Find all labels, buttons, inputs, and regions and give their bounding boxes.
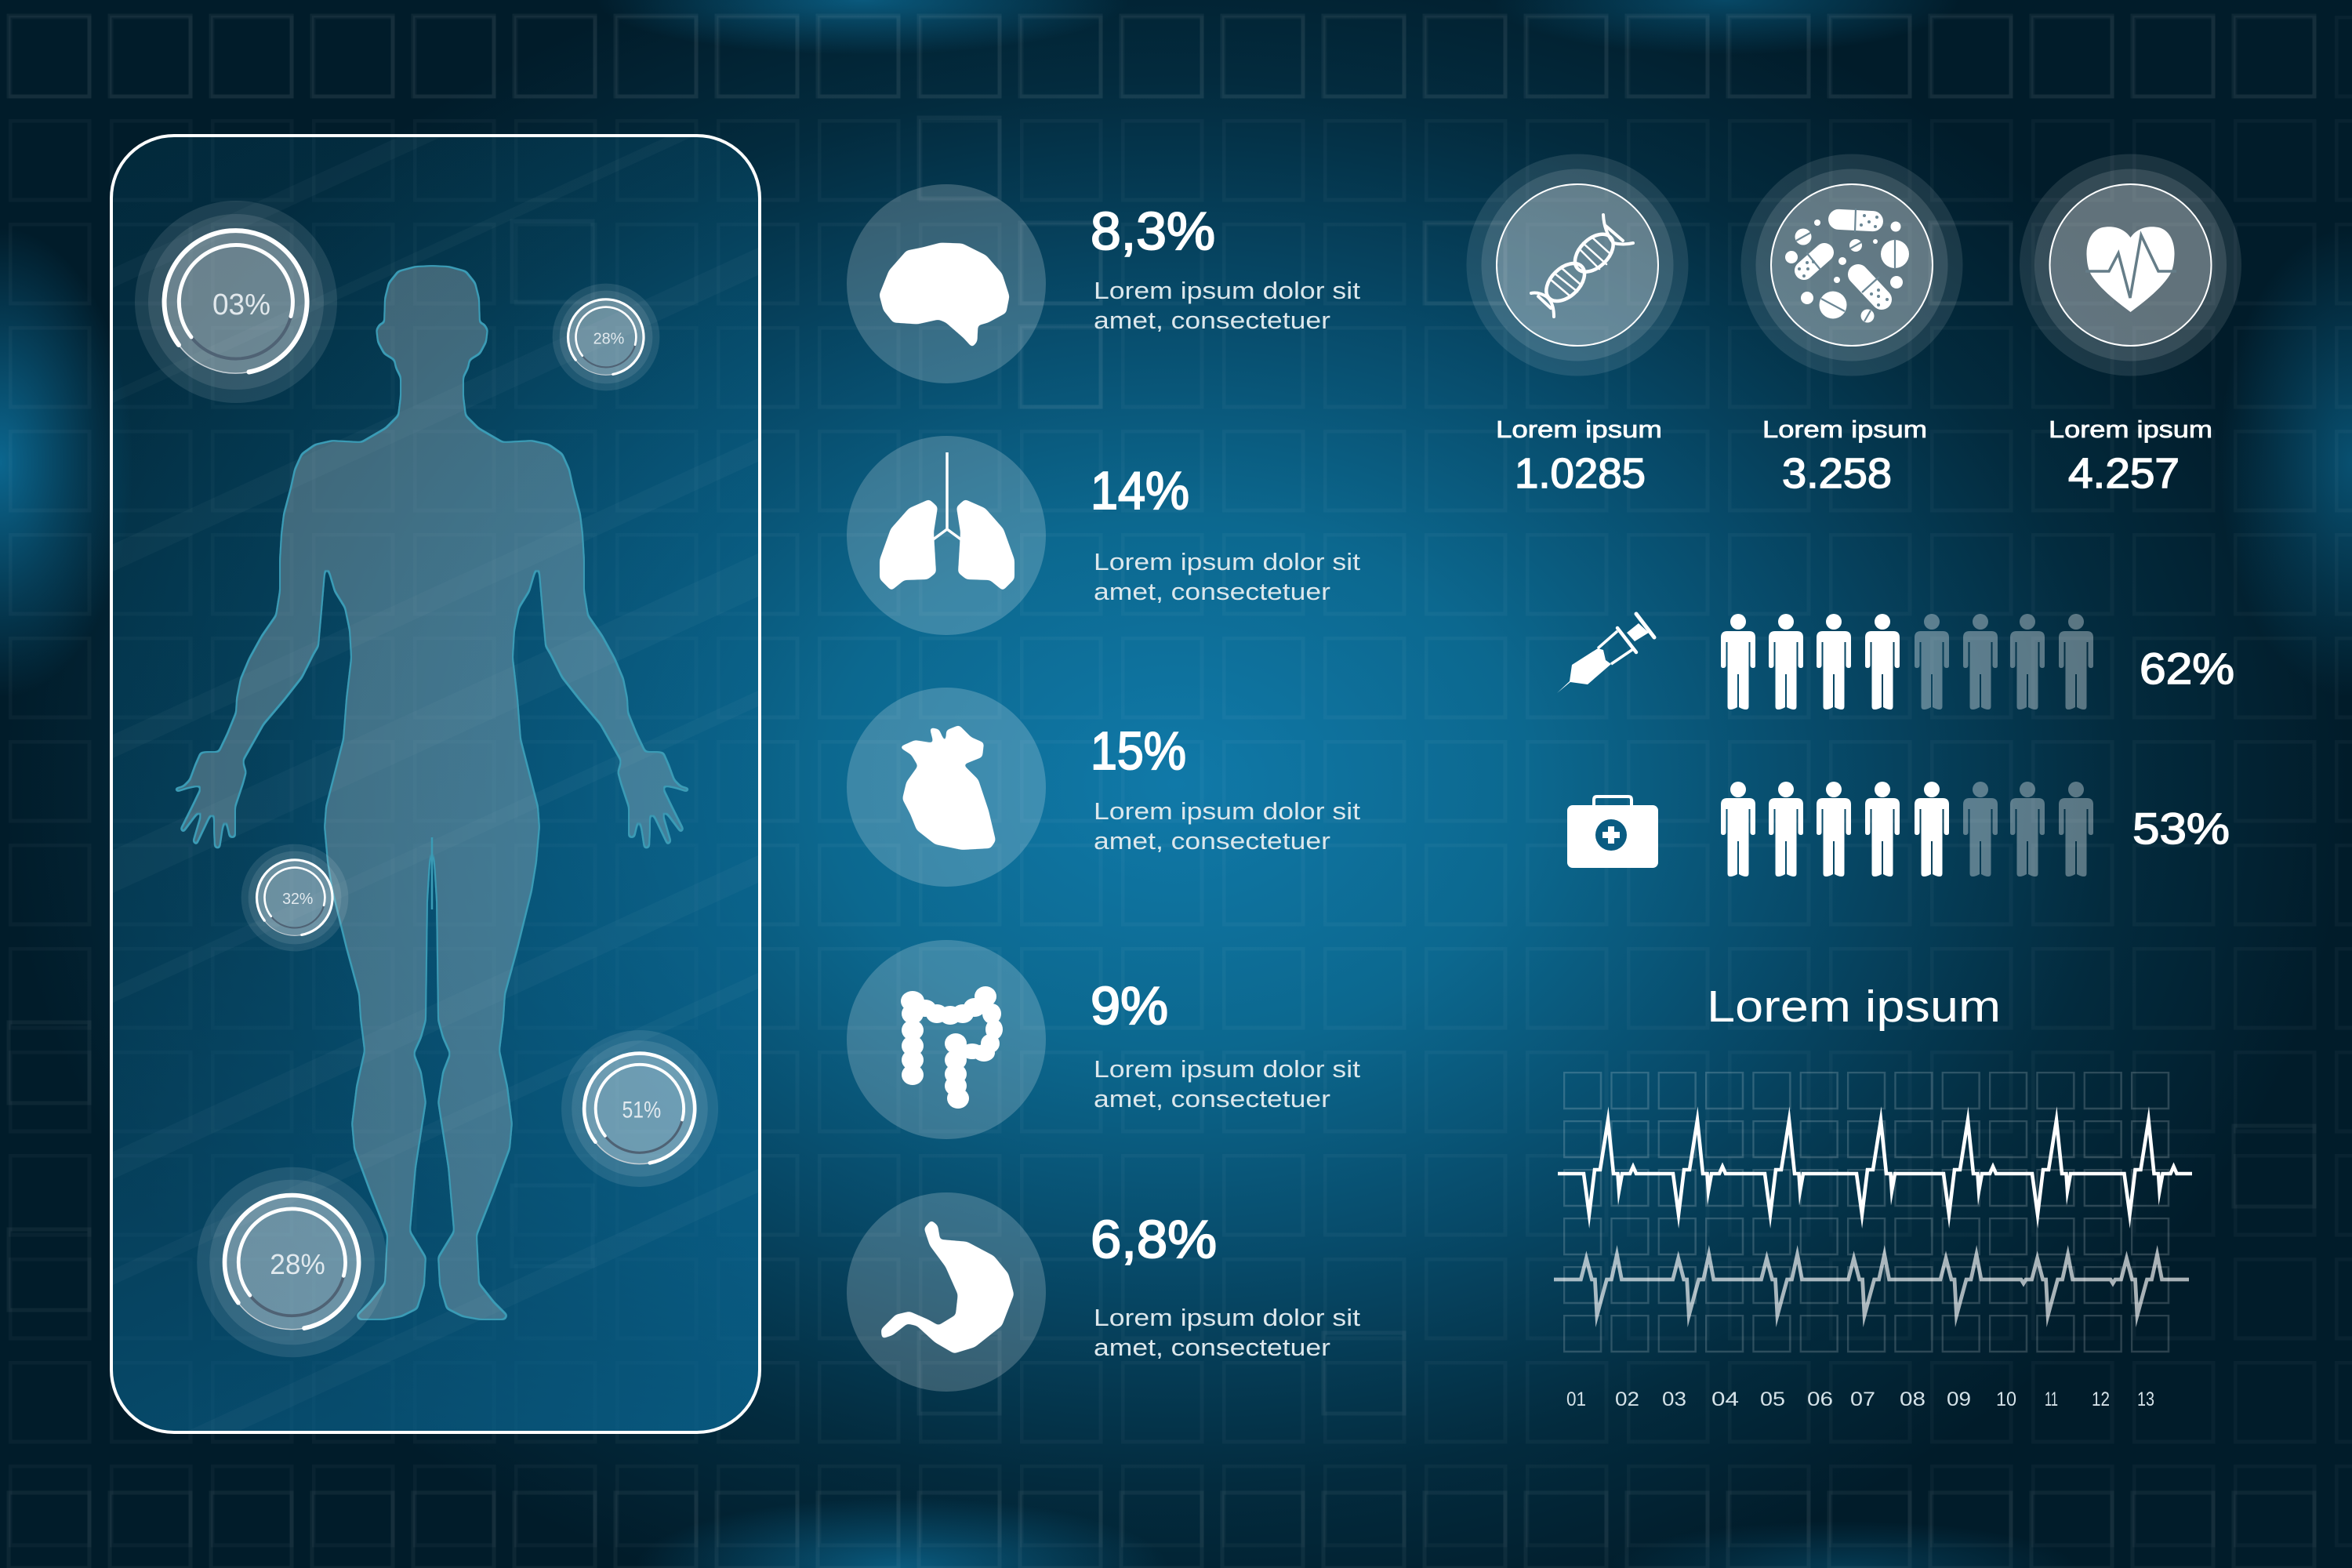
ecg axis labels: 06 — [1807, 1388, 1833, 1410]
organ stat: intestine 9% — [847, 940, 1360, 1139]
organ stat: heart 15% — [847, 688, 1360, 887]
organ stat: intestine 9%: Lorem ipsum dolor sit — [1094, 1055, 1360, 1083]
organ stat: intestine 9%: amet, consectetuer — [1094, 1085, 1330, 1112]
icon: stomach — [882, 1221, 1013, 1352]
icon: pills — [1785, 209, 1909, 323]
ecg axis labels — [1566, 1388, 2154, 1410]
ecg axis labels: 01 — [1566, 1388, 1586, 1410]
organ stat: lungs 14%: amet, consectetuer — [1094, 578, 1330, 605]
organ stat: stomach 6,8%: amet, consectetuer — [1094, 1334, 1330, 1361]
gauge: 03%: 03% — [212, 289, 270, 321]
stat: pills — [1740, 154, 1963, 497]
stat: dna: Lorem ipsum — [1496, 416, 1662, 443]
organ stat: stomach 6,8% — [847, 1192, 1360, 1392]
ecg axis labels: 08 — [1900, 1388, 1926, 1410]
stat: heartbeat: Lorem ipsum — [2049, 416, 2212, 443]
stat: dna: 1.0285 — [1515, 450, 1646, 497]
chart title: Lorem ipsum — [1707, 982, 2001, 1032]
organ stat: brain 8,3%: Lorem ipsum dolor sit — [1094, 277, 1360, 304]
panel: body scan — [110, 134, 761, 1434]
gauge: 28% small: 28% — [593, 330, 624, 347]
ecg axis labels: 11 — [2045, 1388, 2058, 1410]
ecg axis labels: 13 — [2137, 1388, 2154, 1410]
stat: heartbeat — [2020, 154, 2241, 497]
ecg line: primary — [1558, 1120, 2192, 1214]
body silhouette — [174, 265, 690, 1320]
ecg axis labels: 12 — [2092, 1388, 2110, 1410]
organ stat: lungs 14% — [847, 436, 1360, 635]
organ stat: stomach 6,8%: Lorem ipsum dolor sit — [1094, 1304, 1360, 1331]
stat: pills: 3.258 — [1782, 450, 1892, 497]
stat: pills: Lorem ipsum — [1762, 416, 1927, 443]
pictogram row: 62%: 62% — [2140, 644, 2234, 693]
ecg axis labels: 07 — [1850, 1388, 1875, 1410]
ecg axis labels: 10 — [1996, 1388, 2016, 1410]
organ stat: brain 8,3%: amet, consectetuer — [1094, 307, 1330, 334]
icon: heart with pulse — [2085, 227, 2176, 312]
gauge: 51% — [561, 1030, 718, 1187]
gauge: 28% large — [197, 1167, 387, 1357]
organ stat: stomach 6,8%: 6,8% — [1091, 1210, 1217, 1269]
pictogram row: 53%: 53% — [2132, 804, 2230, 853]
icon: first aid kit — [1567, 797, 1658, 868]
gauge: 32% — [241, 844, 348, 951]
organ stat: lungs 14%: Lorem ipsum dolor sit — [1094, 548, 1360, 575]
pictogram row: 53% — [1721, 782, 2230, 877]
ecg axis labels: 05 — [1760, 1388, 1785, 1410]
icon: heart organ — [901, 726, 995, 849]
organ stat: heart 15%: 15% — [1091, 721, 1186, 781]
icon: brain — [880, 244, 1008, 346]
organ stat: heart 15%: amet, consectetuer — [1094, 827, 1330, 855]
organ stat: heart 15%: Lorem ipsum dolor sit — [1094, 797, 1360, 825]
ecg line: secondary — [1554, 1254, 2189, 1316]
organ stat: brain 8,3% — [847, 184, 1360, 383]
stat: heartbeat: 4.257 — [2068, 450, 2180, 497]
icon: intestine — [901, 986, 1003, 1109]
icon: dna helix — [1531, 215, 1633, 317]
gauge: 03% — [135, 201, 337, 403]
icon: syringe — [1557, 614, 1654, 693]
ecg axis labels: 02 — [1615, 1388, 1639, 1410]
ecg axis labels: 09 — [1947, 1388, 1971, 1410]
organ stat: brain 8,3%: 8,3% — [1091, 201, 1215, 261]
gauge: 32%: 32% — [282, 891, 313, 908]
ecg axis labels: 03 — [1662, 1388, 1686, 1410]
gauge: 28% small — [553, 284, 659, 390]
icon: lungs — [880, 452, 1014, 590]
ecg chart — [1554, 1072, 2192, 1410]
gauge: 51%: 51% — [622, 1098, 661, 1123]
stat: dna — [1466, 154, 1689, 497]
ecg axis labels: 04 — [1711, 1388, 1739, 1410]
organ stat: intestine 9%: 9% — [1091, 976, 1168, 1036]
organ stat: lungs 14%: 14% — [1091, 461, 1189, 521]
gauge: 28% large: 28% — [270, 1249, 325, 1280]
pictogram row: 62% — [1721, 614, 2234, 710]
